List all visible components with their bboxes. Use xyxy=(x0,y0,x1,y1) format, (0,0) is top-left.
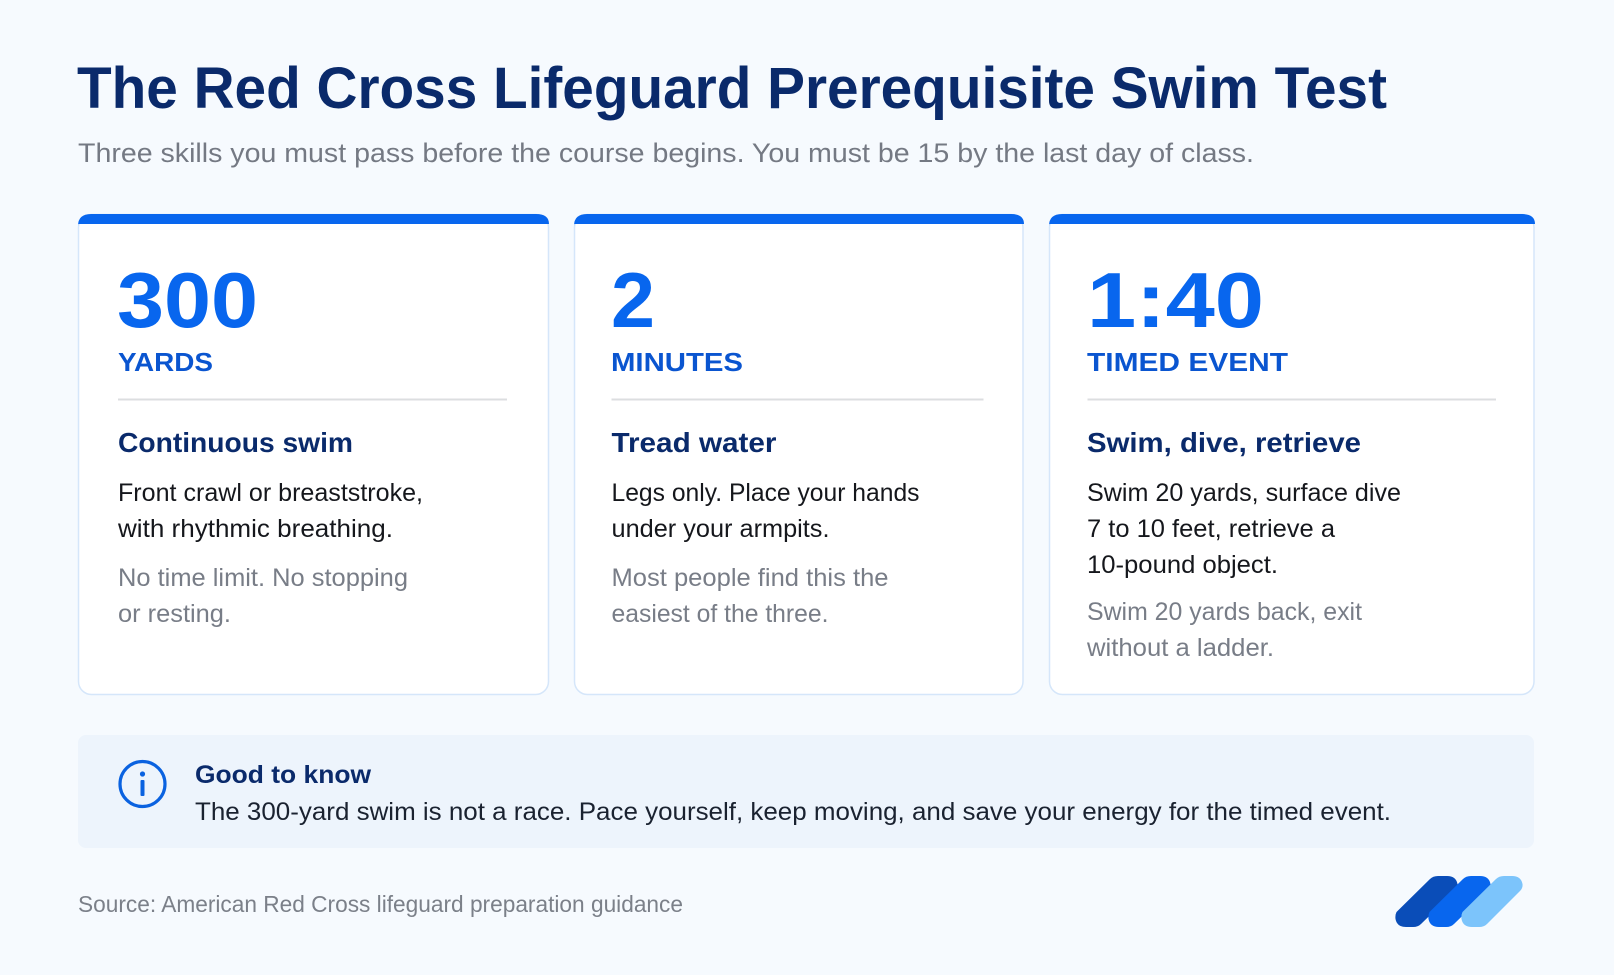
callout heading: Good to know xyxy=(195,761,372,789)
heading: continuous swim: Continuous swim xyxy=(118,427,353,458)
note: easiest of the three. xyxy=(612,600,828,628)
logo xyxy=(1395,876,1523,927)
description xyxy=(1087,479,1401,579)
description: 7 to 10 feet, retrieve a xyxy=(1087,515,1335,543)
source note: Source: American Red Cross lifeguard preparation guidance xyxy=(78,891,683,917)
description: with rhythmic breathing. xyxy=(117,515,393,543)
description xyxy=(117,479,423,543)
note: Swim 20 yards back, exit xyxy=(1087,598,1362,626)
callout text: The 300-yard swim is not a race. Pace yourself, keep moving, and save your energy for the timed event. xyxy=(195,798,1391,826)
description xyxy=(612,479,920,543)
unit: minutes: MINUTES xyxy=(611,347,743,377)
note xyxy=(118,564,408,628)
stat: 300: 300 xyxy=(117,256,258,344)
unit: timed event: TIMED EVENT xyxy=(1087,347,1288,377)
subtitle: Three skills you must pass before the course begins. You must be 15 by the last day of class. xyxy=(78,138,1254,168)
note xyxy=(612,564,888,628)
note: without a ladder. xyxy=(1086,634,1274,662)
panel: swim, dive, retrieve xyxy=(1049,214,1535,694)
note: Most people find this the xyxy=(612,564,888,592)
title: The Red Cross Lifeguard Prerequisite Swim Test xyxy=(77,56,1387,121)
stat: 1:40: 1:40 xyxy=(1087,256,1264,344)
stat: 2: 2 xyxy=(611,256,655,344)
note xyxy=(1086,598,1362,662)
description: Swim 20 yards, surface dive xyxy=(1087,479,1401,507)
note: or resting. xyxy=(118,600,231,628)
description: 10-pound object. xyxy=(1087,551,1278,579)
heading: swim, dive, retrieve: Swim, dive, retrieve xyxy=(1087,427,1361,458)
icon: info xyxy=(120,762,165,806)
callout: good to know xyxy=(78,735,1534,848)
description: Legs only. Place your hands xyxy=(612,479,920,507)
description: Front crawl or breaststroke, xyxy=(118,479,423,507)
unit: yards: YARDS xyxy=(118,347,213,377)
description: under your armpits. xyxy=(612,515,830,543)
heading: tread water: Tread water xyxy=(612,427,777,458)
note: No time limit. No stopping xyxy=(118,564,408,592)
panel: continuous swim xyxy=(78,214,549,694)
panel: tread water xyxy=(574,214,1024,694)
